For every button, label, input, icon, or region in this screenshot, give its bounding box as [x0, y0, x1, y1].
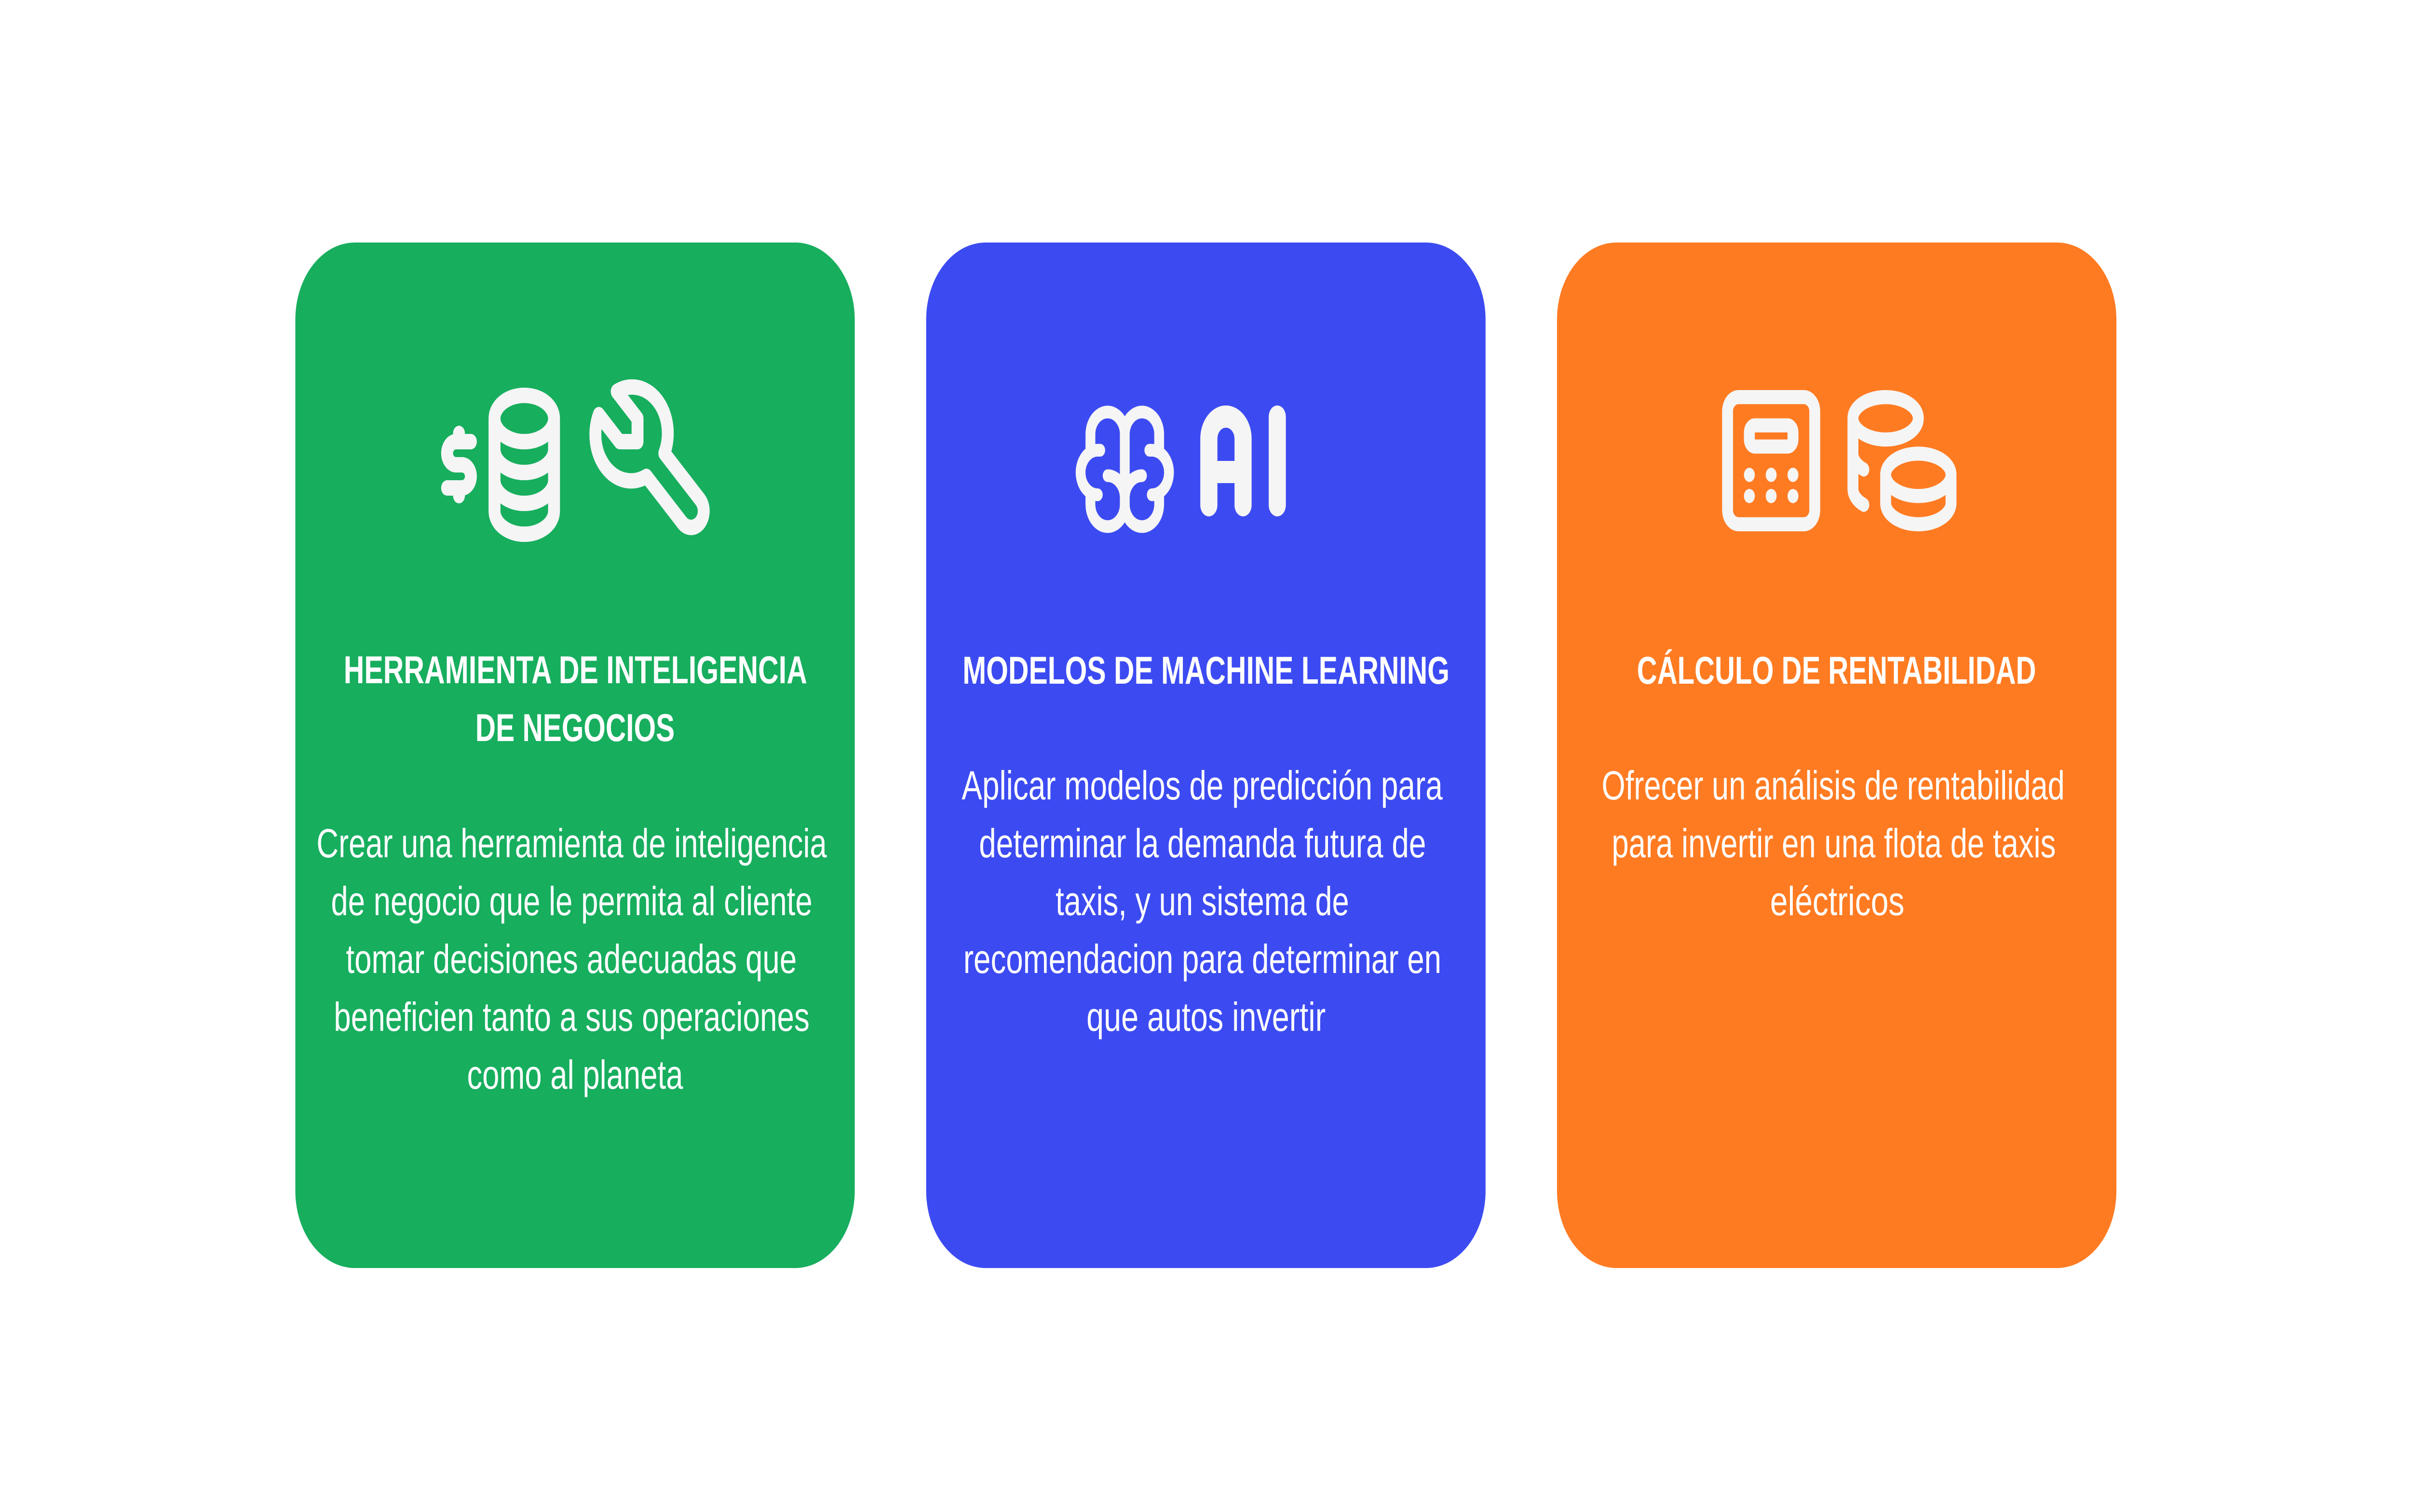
body text	[1602, 763, 2065, 924]
heading	[344, 648, 807, 750]
icon: wrench	[596, 387, 704, 527]
body text: beneficien tanto a sus operaciones	[334, 994, 810, 1040]
body text: tomar decisiones adecuadas que	[346, 936, 797, 982]
body text: Crear una herramienta de inteligencia	[316, 821, 827, 866]
heading: CÁLCULO DE RENTABILIDAD	[1637, 649, 2036, 692]
body text: que autos invertir	[1086, 994, 1326, 1040]
icon: dollar sign and coin stack	[447, 395, 554, 534]
panel: herramienta de inteligencia de negocios	[295, 243, 855, 1268]
body text: eléctricos	[1770, 878, 1904, 924]
heading: DE NEGOCIOS	[475, 706, 675, 750]
body text: Ofrecer un análisis de rentabilidad	[1602, 763, 2065, 808]
heading: MODELOS DE MACHINE LEARNING	[962, 649, 1449, 692]
body text: como al planeta	[467, 1052, 683, 1097]
body text	[316, 821, 827, 1097]
heading: HERRAMIENTA DE INTELIGENCIA	[344, 648, 807, 692]
blue card background	[926, 243, 1486, 1268]
body text: para invertir en una flota de taxis	[1612, 821, 2056, 866]
orange card background	[1557, 243, 2116, 1268]
icon: coins	[1853, 397, 1951, 524]
icon: brain	[1081, 412, 1169, 526]
green card background	[295, 243, 855, 1268]
panel: calculo de rentabilidad	[1557, 243, 2116, 1268]
body text: de negocio que le permita al cliente	[331, 878, 813, 924]
body text: recomendacion para determinar en	[963, 936, 1441, 982]
body text: taxis, y un sistema de	[1056, 878, 1349, 924]
body text: Aplicar modelos de predicción para	[962, 763, 1443, 808]
body text: determinar la demanda futura de	[979, 821, 1426, 866]
icon: AI letters	[1209, 417, 1277, 505]
body text	[962, 763, 1443, 1040]
panel: modelos de machine learning	[926, 243, 1486, 1268]
icon: calculator	[1728, 397, 1815, 524]
